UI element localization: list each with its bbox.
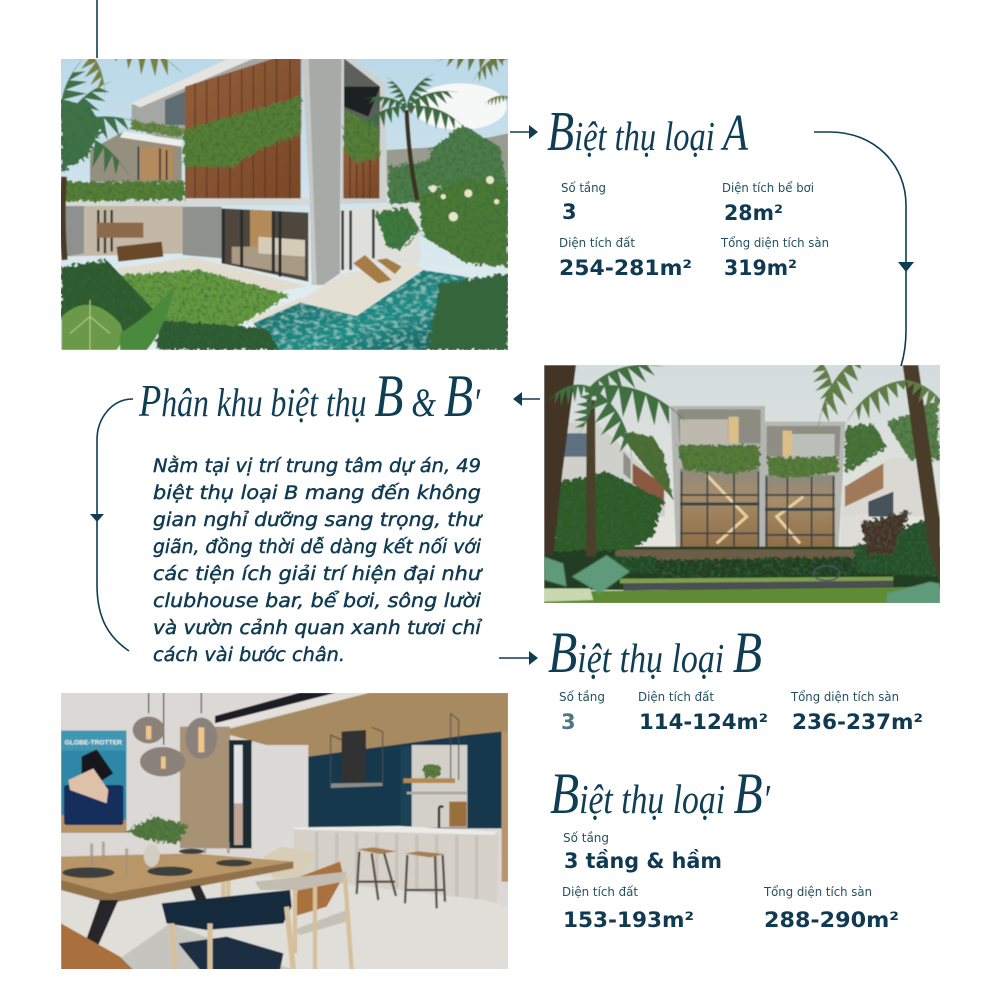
stats: villa type B: 114-124m² [639,710,768,734]
body paragraph: biệt thụ loại B mang đến không [153,483,481,504]
stats: villa type B prime: Tổng diện tích sàn [763,885,872,899]
photo: kitchen and dining interior [60,690,510,973]
arrow to villa A heading [510,125,538,139]
body paragraph: cách vài bước chân. [153,645,345,666]
body paragraph: và vườn cảnh quan xanh tươi chỉ [153,618,483,639]
stats: villa type A: Diện tích bể bơi [722,181,814,195]
stats: villa type B prime: Diện tích đất [562,885,638,899]
stats: villa type A: 254-281m² [559,256,692,280]
stats: villa type A: 28m² [724,201,783,225]
body paragraph: gian nghỉ dưỡng sang trọng, thư [153,510,483,531]
arrow to villa B heading [499,651,538,665]
photo: villa type A exterior with pool [54,35,513,350]
top connector line [96,0,98,58]
stats: villa type B prime: 288-290m² [764,908,899,932]
body paragraph: các tiện ích giải trí hiện đại như [153,564,484,585]
stats: villa type B: 236-237m² [792,710,923,734]
stats: villa type B: Diện tích đất [638,690,714,704]
curved connector from section heading to text [90,399,133,651]
stats: villa type B: 3 [561,710,576,734]
photo: villa type B exterior with palms [544,365,940,603]
stats: villa type B prime [562,831,899,932]
stats: villa type A: Tổng diện tích sàn [720,236,829,250]
stats: villa type A: Số tầng [561,181,606,195]
heading: villa zone B and B': Phân khu biệt thụ B & B′ [138,363,481,429]
stats: villa type B [559,690,923,734]
body paragraph: giãn, đồng thời dễ dàng kết nối với [153,537,482,558]
stats: villa type A: 319m² [724,256,797,280]
curved connector from villa A to photo [814,132,914,366]
stats: villa type B: Tổng diện tích sàn [790,690,899,704]
stats: villa type B: Số tầng [559,690,605,704]
heading: villa type B prime: Biệt thụ loại B′ [550,761,771,826]
heading: villa type A: Biệt thụ loại A [547,101,748,163]
arrow from photo to section heading [513,392,540,406]
stats: villa type A: Diện tích đất [559,236,635,250]
body paragraph: clubhouse bar, bể bơi, sông lười [153,591,482,612]
photo: kitchen and dining interior: GLOBE-TROTTER [65,741,123,747]
body paragraph: Nằm tại vị trí trung tâm dự án, 49 [153,456,481,477]
stats: villa type B prime: 3 tầng & hầm [564,849,722,873]
stats: villa type B prime: 153-193m² [563,908,694,932]
stats: villa type A: 3 [562,200,577,224]
body paragraph [153,456,484,666]
stats: villa type B prime: Số tầng [563,831,609,845]
stats: villa type A [559,181,829,280]
heading: villa type B: Biệt thụ loại B [548,620,762,685]
